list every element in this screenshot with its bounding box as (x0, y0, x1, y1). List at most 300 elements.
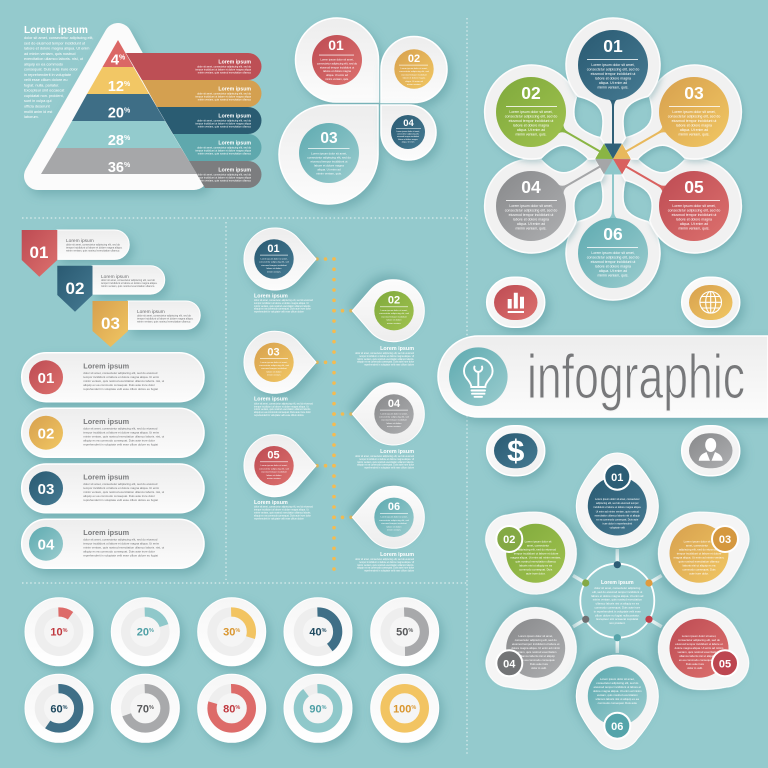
cluster node 01: Lorem ipsum dolor sit amet, consectetur (595, 498, 640, 501)
pin 05: 05 (267, 450, 280, 462)
cluster node 01: exercitation ullamco laboris nisi ut aliquip (595, 514, 641, 517)
petal 01: Lorem ipsum dolor sit amet, (320, 58, 354, 62)
pin 04: labore et dolore (386, 422, 402, 425)
pin 06: reprehenderit in voluptate velit esse cillum dolore (364, 570, 415, 573)
ribbon labels: minim veniam, quis nostrud exercitation ullamco (198, 153, 252, 156)
petal 01: minim veniam, quis. (325, 77, 349, 81)
flower node 06: Lorem ipsum dolor sit amet, (591, 251, 635, 255)
tag 02: tempor incididunt ut labore et dolore magna aliqua. (101, 282, 158, 285)
dial 40 percent: 40 (309, 627, 322, 639)
ribbon labels: dolor sit amet, consectetur adipiscing elit, sed do (197, 174, 252, 177)
heading: lorem ipsum intro text: sunt in culpa qui (24, 99, 52, 103)
pill 01: reprehenderit in voluptate velit esse cillum dolore eu fugiat (83, 387, 158, 391)
pin 05: minim veniam, quis nostrud exercitation ullamco laboris. (254, 512, 311, 514)
tag 01: Lorem ipsum (66, 238, 94, 244)
pill 04 (22, 519, 204, 568)
ribbon labels: dolor sit amet, consectetur adipiscing elit, sed do (197, 66, 252, 69)
petal 01: eiusmod tempor incididunt ut (320, 65, 354, 69)
tag 03: minim veniam, quis nostrud exercitation ullamco. (137, 320, 191, 324)
pin 02: aliquip ex ea commodo consequat. Duis aute irure dolor (357, 361, 414, 364)
pin 03: consectetur adipiscing elit, sed (259, 364, 290, 367)
panel: percentage donut dials (25, 598, 439, 742)
cluster node 05: Duis aute irure (686, 662, 705, 666)
cluster node 01: ex ea commodo consequat. Duis aute (596, 518, 639, 522)
petal 03: aliqua. Ut enim ad (317, 168, 341, 172)
dial 60 percent: 60 (50, 703, 63, 715)
cluster node 02: magna aliqua. Ut enim ad minim veniam, (510, 556, 561, 560)
pill 03 (22, 464, 204, 513)
dial 10 percent: 10 (50, 627, 63, 639)
cluster node 02: aute irure dolor. (526, 572, 546, 576)
cluster node 04: consectetur adipiscing elit, sed do (515, 638, 557, 642)
cluster node 04: eiusmod tempor incididunt ut labore et (512, 642, 560, 646)
cluster node 05: 05 (719, 658, 731, 670)
cluster node 05: consectetur adipiscing elit, sed do (678, 638, 720, 642)
cluster node 05 (643, 592, 766, 711)
cluster node 06: consectetur adipiscing elit, sed do (596, 681, 639, 685)
ribbon labels: Lorem ipsum (218, 114, 251, 120)
cluster node 06: eiusmod tempor incididunt ut labore et (594, 685, 641, 689)
flower node 01: aliqua. Ut enim ad (599, 81, 627, 85)
ribbon labels: dolor sit amet, consectetur adipiscing elit, sed do (197, 120, 252, 123)
dial 90 percent: % (322, 705, 327, 711)
pin 01: aliquip ex ea commodo consequat. Duis aute irure dolor (254, 308, 311, 311)
cluster node 02: Lorem ipsum dolor sit (525, 540, 552, 544)
pill 02: dolor sit amet, consectetur adipiscing elit, sed do eiusmod (83, 426, 158, 430)
cluster node 06: veniam, quis nostrud exercitation (597, 693, 638, 697)
cluster node 02 (469, 491, 591, 609)
ribbon labels: minim veniam, quis nostrud exercitation ullamco (198, 180, 252, 183)
pin 01: tempor incididunt ut labore et dolore magna aliqua. Ut (254, 302, 309, 305)
ribbon labels: tempor incididunt ut labore et dolore magna aliqua (195, 123, 252, 126)
pin 02: Lorem ipsum (380, 346, 414, 352)
cluster node 04: ullamco laboris nisi ut aliquip (519, 654, 555, 658)
pill 03: Lorem ipsum (83, 472, 130, 482)
pill 02: Lorem ipsum (83, 417, 130, 426)
cluster node 06: Lorem ipsum dolor sit amet, (600, 677, 635, 681)
pyramid percentages: 12 (108, 79, 124, 95)
flower node 01: labore et dolore magna (595, 76, 631, 80)
pin 04: eiusmod tempor incididunt (381, 419, 407, 422)
pyramid percentages: % (124, 135, 131, 142)
tag 01: dolor sit amet, consectetur adipiscing elit, sed do (66, 244, 121, 246)
ribbon labels: minim veniam, quis nostrud exercitation ullamco (198, 72, 252, 75)
pin 02 (352, 280, 424, 367)
pill 04: aliquip ex ea commodo consequat. Duis aute irure dolor (83, 550, 155, 554)
ribbon labels: minim veniam, quis nostrud exercitation ullamco (198, 99, 252, 102)
petal 03: eiusmod tempor incididunt ut (311, 160, 348, 164)
cluster node 02: commodo consequat. Duis (519, 568, 553, 572)
banner: infographic title (438, 336, 768, 417)
petal 02: minim veniam. (407, 84, 421, 86)
heading: lorem ipsum intro text: Excepteur sint occaecat (24, 89, 65, 93)
pin 06 (352, 486, 424, 573)
tag 03: dolor sit amet, consectetur adipiscing elit, sed do (137, 314, 192, 318)
pyramid percentages: % (119, 54, 126, 62)
central ring with summary text: in reprehenderit in voluptate velit esse (594, 609, 641, 613)
petal 01: aliqua. Ut enim ad (326, 73, 348, 77)
pin 04: aliquip ex ea commodo consequat. Duis aute irure dolor (357, 464, 414, 467)
tag 02: Lorem ipsum (101, 274, 129, 280)
petal 02: labore et dolore magna (403, 77, 426, 80)
tag 03 (92, 301, 200, 347)
tag 02 (57, 266, 165, 312)
flower node 06: labore et dolore magna (595, 264, 631, 268)
ribbon labels: dolor sit amet, consectetur adipiscing elit, sed do (197, 147, 252, 150)
dial 60 percent: % (63, 705, 68, 711)
pin 06: consectetur adipiscing elit, sed (379, 519, 410, 522)
pyramid percentages: 4 (111, 52, 119, 68)
pin 05: tempor incididunt ut labore et dolore magna aliqua. Ut (254, 509, 309, 512)
pin 02: reprehenderit in voluptate velit esse cillum dolore (364, 364, 415, 367)
dial 20 percent: % (149, 628, 154, 634)
cluster node 05: veniam, quis nostrud exercitation (678, 650, 719, 654)
icon: person badge (682, 426, 740, 476)
cluster node 06: 06 (611, 721, 623, 733)
flower node 05: minim veniam, quis. (679, 226, 709, 230)
dial 10 percent: % (63, 628, 68, 634)
cluster node 05: ex ea commodo consequat. (679, 658, 713, 662)
flower node 05: labore et dolore magna (676, 218, 712, 222)
pin 04: minim veniam, quis nostrud exercitation ullamco laboris. (357, 461, 414, 464)
central ring with summary text: elit, sed do eiusmod tempor incididunt ut (592, 590, 643, 594)
heading: lorem ipsum intro text: consequat. Duis aute irure dolor (24, 68, 79, 72)
cluster node 02: tempor incididunt ut labore et dolore (514, 552, 559, 556)
ribbon labels: minim veniam, quis nostrud exercitation ullamco (198, 126, 252, 129)
flower node 02: eiusmod tempor incididunt ut (509, 119, 553, 123)
pin 06: dolor sit amet, consectetur adipiscing elit, sed do eiusmod (355, 558, 415, 561)
pin 06: Lorem ipsum (380, 552, 414, 558)
cluster node 04: Lorem ipsum dolor sit amet, (518, 634, 553, 638)
flower node 05: consectetur adipiscing elit, sed do (668, 208, 720, 212)
icon: dollar badge (487, 426, 545, 476)
petal 04: Lorem ipsum dolor sit amet, (396, 130, 420, 133)
flower node 06: 06 (603, 224, 623, 244)
cluster node 02: 02 (503, 534, 515, 546)
petal 01: labore et dolore magna (323, 69, 351, 73)
dotted timeline (317, 259, 351, 570)
central ring with summary text: cillum dolore eu fugiat nulla pariatur. (595, 613, 640, 617)
flower node 03 (659, 77, 729, 147)
pill 01: dolor sit amet, consectetur adipiscing elit, sed do eiusmod (83, 371, 158, 375)
heading: lorem ipsum intro text: exercitation ullamco laboris. nisi, ut (24, 57, 84, 61)
tag 01: 01 (30, 243, 48, 262)
central ring with summary text: Excepteur sint occaecat cupidatat (596, 617, 638, 621)
pill 01: aliquip ex ea commodo consequat. Duis aute irure dolor (83, 383, 155, 387)
dial 50 percent: 50 (396, 627, 408, 639)
cluster node 06: ullamco laboris nisi ut aliquip ex ea (596, 697, 639, 701)
cluster node 01: Ut enim ad minim veniam, quis nostrud (596, 510, 640, 513)
flower node 03: Lorem ipsum dolor sit amet, (672, 110, 716, 114)
pin 03: Lorem ipsum (254, 397, 288, 403)
pin 01: labore et dolore (266, 267, 282, 270)
flower node 01: 01 (603, 36, 623, 56)
heading: lorem ipsum intro text: cupidatat non. proident, (24, 94, 64, 98)
petal 04: labore et dolore magna (398, 138, 419, 141)
pin 03: minim veniam, quis nostrud exercitation ullamco laboris. (254, 408, 311, 411)
petal 01: consectetur adipiscing elit, sed do (317, 61, 358, 65)
dial 100 percent: % (411, 705, 416, 711)
pin 04: dolor sit amet, consectetur adipiscing elit, sed do eiusmod (355, 455, 415, 458)
cluster node 03: aute irure dolor. (689, 572, 709, 576)
pyramid percentages: % (124, 162, 131, 169)
petal 03: labore et dolore magna (314, 164, 344, 168)
flower node 02: labore et dolore magna (513, 124, 549, 128)
cluster node 03: amet, consectetur (686, 544, 708, 548)
heading: lorem ipsum intro text: officia deserunt (24, 105, 51, 109)
tag 02: 02 (66, 279, 84, 298)
cluster node 03: Lorem ipsum dolor sit (684, 540, 711, 544)
pin 04: 04 (388, 398, 401, 410)
pin 06: Lorem ipsum dolor sit amet, (380, 516, 408, 519)
pyramid percentages: 20 (108, 106, 124, 122)
pin 06: 06 (388, 501, 400, 513)
pin 04: consectetur adipiscing elit, sed (379, 416, 410, 418)
petal 04: consectetur adipiscing elit, (397, 132, 420, 136)
dial 40 percent (284, 598, 352, 666)
pill 03: aliquip ex ea commodo consequat. Duis aute irure dolor (83, 494, 155, 498)
tag 02: minim veniam, quis nostrud exercitation ullamco. (101, 285, 155, 288)
ribbon labels: Lorem ipsum (218, 86, 251, 92)
flower node 03: eiusmod tempor incididunt ut (672, 119, 716, 123)
pin 05: dolor sit amet, consectetur adipiscing elit, sed do eiusmod (254, 506, 314, 509)
pyramid ribbons (126, 53, 262, 188)
icon: bar chart badge (487, 277, 545, 327)
pill 04: tempor incididunt ut labore et dolore magna aliqua. Ut enim (83, 542, 160, 546)
flower node 02 (496, 77, 566, 147)
cluster node 04: ex ea commodo consequat. (521, 658, 555, 662)
pin 04: minim veniam. (387, 426, 401, 428)
pill 01: minim veniam, quis nostrud exercitation ullamco laboris. nisi, ut (83, 379, 164, 383)
petal 04: 04 (403, 118, 414, 129)
cluster node 05: ullamco laboris nisi ut aliquip (679, 654, 715, 658)
pin 03: minim veniam. (267, 375, 281, 377)
pin 02: consectetur adipiscing elit, sed (379, 312, 410, 315)
pin 05: labore et dolore (266, 474, 282, 477)
dial 50 percent (371, 598, 439, 666)
pin 03: reprehenderit in voluptate velit esse cillum dolore (254, 414, 305, 417)
flower node 01: consectetur adipiscing elit, sed do (587, 68, 639, 72)
pill 02: reprehenderit in voluptate velit esse cillum dolore eu fugiat (83, 442, 158, 446)
pin 05: Lorem ipsum (254, 500, 288, 506)
pill 01: 01 (38, 370, 54, 387)
flower node 02: aliqua. Ut enim ad (517, 128, 545, 132)
heading: lorem ipsum intro text: Lorem ipsum (24, 25, 88, 36)
icon: dollar badge: $ (507, 433, 524, 468)
pyramid percentages: % (124, 81, 131, 88)
panel: pyramid chart (38, 37, 262, 188)
cluster node 03: adipiscing elit, sed do eiusmod (679, 548, 717, 552)
pin 03: labore et dolore (266, 370, 282, 373)
dial 60 percent (25, 674, 93, 742)
cluster node 02: laboris nisi ut aliquip ex ea (519, 564, 553, 568)
panel: map pin timeline (244, 228, 424, 573)
pin 01: 01 (267, 243, 280, 255)
dial 40 percent: % (322, 628, 327, 634)
cluster node 02: quis nostrud exercitation ullamco (515, 560, 557, 564)
pin 02: dolor sit amet, consectetur adipiscing elit, sed do eiusmod (355, 352, 415, 355)
dial 10 percent (25, 598, 93, 666)
dial 70 percent: 70 (137, 703, 149, 715)
pyramid percentages: 36 (108, 160, 124, 176)
flower node 06: aliqua. Ut enim ad (599, 269, 627, 273)
cluster node 01 (576, 453, 658, 547)
pill 02: aliquip ex ea commodo consequat. Duis aute irure dolor (83, 438, 155, 442)
pin 06: tempor incididunt ut labore et dolore magna aliqua. Ut (359, 561, 414, 564)
flower node 02: Lorem ipsum dolor sit amet, (509, 110, 553, 114)
tag 01: minim veniam, quis nostrud exercitation ullamco. (66, 250, 120, 252)
flower node 03: 03 (684, 83, 704, 103)
flower node 01: Lorem ipsum dolor sit amet, (591, 63, 635, 67)
ribbon labels: tempor incididunt ut labore et dolore magna aliqua (195, 177, 252, 180)
pin 01: eiusmod tempor incididunt (261, 264, 287, 267)
cluster node 04 (469, 592, 591, 711)
tag 03: 03 (101, 314, 120, 333)
pyramid bands (41, 40, 197, 174)
heading: lorem ipsum intro text: ad minim veniam, quis nostrud (24, 52, 76, 56)
flower node 06: minim veniam, quis. (598, 274, 628, 278)
cluster node 03: quis nostrud exercitation ullamco (679, 560, 720, 564)
heading: lorem ipsum intro text: aliquip ex ea commodo (24, 62, 63, 66)
pin 03: eiusmod tempor incididunt (261, 367, 287, 370)
central ring with summary text: minim veniam, quis nostrud exercitation (593, 598, 642, 602)
cluster node 02: amet, consectetur (527, 544, 549, 548)
central ring with summary text: non proident. (609, 621, 626, 625)
icon: globe badge (682, 277, 740, 327)
dial 30 percent: % (235, 628, 240, 634)
pin 03: tempor incididunt ut labore et dolore magna aliqua. Ut (254, 405, 309, 408)
pill 04: minim veniam, quis nostrud exercitation ullamco laboris. nisi, ut (83, 546, 164, 550)
pin 01: minim veniam. (267, 271, 281, 273)
petal 02: 02 (408, 53, 420, 65)
central ring with summary text: dolor sit amet, consectetur adipiscing (594, 586, 641, 590)
ribbon labels: dolor sit amet, consectetur adipiscing elit, sed do (197, 93, 252, 96)
cluster node 05: Lorem ipsum dolor sit amet, (682, 634, 716, 638)
ribbon labels: Lorem ipsum (218, 168, 251, 174)
panel: numbered pill list (22, 353, 204, 568)
cluster node 05: eiusmod tempor incididunt ut labore et (675, 642, 723, 646)
pill 01 (22, 353, 204, 402)
tag 03: tempor incididunt ut labore et dolore magna aliqua. (137, 318, 194, 320)
heading: lorem ipsum intro text: fugiat. nulla. pariatur. (24, 83, 59, 87)
pin 04: tempor incididunt ut labore et dolore magna aliqua. Ut (359, 458, 414, 461)
heading: lorem ipsum intro text: velit esse cillum dolore eu (24, 78, 67, 82)
dial 90 percent: 90 (309, 703, 322, 715)
pin 01: minim veniam, quis nostrud exercitation ullamco laboris. (254, 305, 311, 308)
petal 03: 03 (320, 130, 338, 147)
pill 02 (22, 408, 204, 457)
petal 02: aliqua. Ut enim ad (405, 80, 424, 83)
pin 02: labore et dolore (386, 319, 402, 322)
pin 06: minim veniam, quis nostrud exercitation ullamco laboris. (357, 564, 414, 567)
flower node 06 (578, 218, 648, 288)
central ring with summary text: ullamco laboris nisi ut aliquip ex ea (596, 602, 639, 606)
cluster node 02: adipiscing elit, sed do eiusmod (518, 548, 556, 552)
pin 05: Lorem ipsum dolor sit amet, (260, 464, 288, 467)
ribbon labels: Lorem ipsum (218, 60, 251, 66)
flower node 02: 02 (521, 83, 541, 103)
dial 80 percent: 80 (223, 703, 235, 715)
flower node 03: aliqua. Ut enim ad (680, 128, 708, 132)
pin 01: dolor sit amet, consectetur adipiscing elit, sed do eiusmod (254, 299, 314, 302)
panel: hexagonal cluster (469, 453, 766, 749)
flower node 05: eiusmod tempor incididunt ut (672, 213, 716, 217)
flower node 04: Lorem ipsum dolor sit amet, (509, 204, 553, 208)
panel: four teardrop petals (279, 18, 447, 204)
tag 01 (22, 230, 129, 277)
pill 03: 03 (38, 481, 54, 498)
pin 01: Lorem ipsum (254, 293, 288, 299)
flower node 03: consectetur adipiscing elit, sed do (668, 114, 720, 118)
central ring with summary text: labore et dolore magna aliqua. Ut enim ad (591, 594, 644, 598)
pin 02: tempor incididunt ut labore et dolore magna aliqua. Ut (359, 355, 414, 358)
petal 02: eiusmod tempor incididunt (401, 73, 427, 76)
flower node 01 (578, 30, 648, 100)
cluster node 03: tempor incididunt ut labore et dolore (677, 552, 722, 556)
pin 01: Lorem ipsum dolor sit amet, (260, 258, 288, 260)
pill 03: minim veniam, quis nostrud exercitation ullamco laboris. nisi, ut (83, 490, 164, 494)
pin 04: reprehenderit in voluptate velit esse cillum dolore (364, 467, 415, 470)
pin 05: eiusmod tempor incididunt (261, 471, 287, 474)
pill 04: reprehenderit in voluptate velit esse cillum dolore eu fugiat (83, 554, 158, 558)
petal 01: 01 (328, 37, 344, 53)
pill 04: 04 (38, 536, 55, 553)
dial 50 percent: % (408, 628, 413, 634)
pyramid percentages (108, 52, 131, 176)
flower node 03: minim veniam, quis. (679, 132, 709, 136)
pin 02: Lorem ipsum dolor sit amet, (380, 309, 408, 312)
petal 04 (381, 105, 436, 160)
cluster node 04: Duis aute irure (530, 662, 549, 666)
flower node 04: eiusmod tempor incididunt ut (509, 213, 553, 217)
dial 100 percent: 100 (393, 703, 411, 715)
pill 03: dolor sit amet, consectetur adipiscing elit, sed do eiusmod (83, 482, 158, 486)
ribbon labels: tempor incididunt ut labore et dolore magna aliqua (195, 150, 252, 153)
pill 01: Lorem ipsum (83, 362, 130, 370)
pill 04: dolor sit amet, consectetur adipiscing elit, sed do eiusmod (83, 538, 158, 542)
dial 80 percent (198, 674, 266, 742)
cluster node 04: dolor in velit. (531, 666, 547, 670)
flower node 01: minim veniam, quis. (598, 86, 628, 90)
pin 02: minim veniam, quis nostrud exercitation ullamco laboris. (357, 358, 414, 361)
pin 06: eiusmod tempor incididunt (381, 522, 407, 525)
flower node 04: labore et dolore magna (513, 218, 549, 222)
dial 100 percent (371, 674, 439, 742)
ribbon labels (195, 60, 252, 183)
flower petal shapes (467, 18, 759, 300)
central ring with summary text: commodo consequat. Duis aute irure (594, 606, 641, 610)
flower node 04: aliqua. Ut enim ad (517, 222, 545, 226)
central ring with summary text (573, 549, 662, 653)
heading: lorem ipsum intro text: laborum. (24, 115, 39, 119)
cluster node 04: 04 (503, 658, 516, 670)
heading: lorem ipsum intro text (24, 25, 93, 119)
pyramid white frame (38, 37, 194, 176)
cluster node 05: dolore magna aliqua. Ut enim ad minim (675, 646, 724, 650)
ribbon labels: Lorem ipsum (218, 140, 251, 146)
cluster node 03: laboris nisi ut aliquip ex ea (683, 564, 716, 568)
tag 02: dolor sit amet, consectetur adipiscing elit, sed do (101, 279, 156, 282)
flower hub slices and connectors (557, 99, 669, 219)
dial 20 percent: 20 (137, 627, 149, 639)
pin 01: reprehenderit in voluptate velit esse cillum dolore (254, 311, 305, 314)
cluster node 01: incididunt ut labore et dolore magna aliqua. (593, 506, 642, 509)
pin 01 (244, 228, 316, 314)
petal 01 (295, 18, 378, 102)
heading: lorem ipsum intro text: dolor sit amet, consectetur adipiscing elit, (24, 36, 93, 40)
dial 80 percent: % (235, 705, 240, 711)
pill 02: 02 (38, 425, 54, 442)
